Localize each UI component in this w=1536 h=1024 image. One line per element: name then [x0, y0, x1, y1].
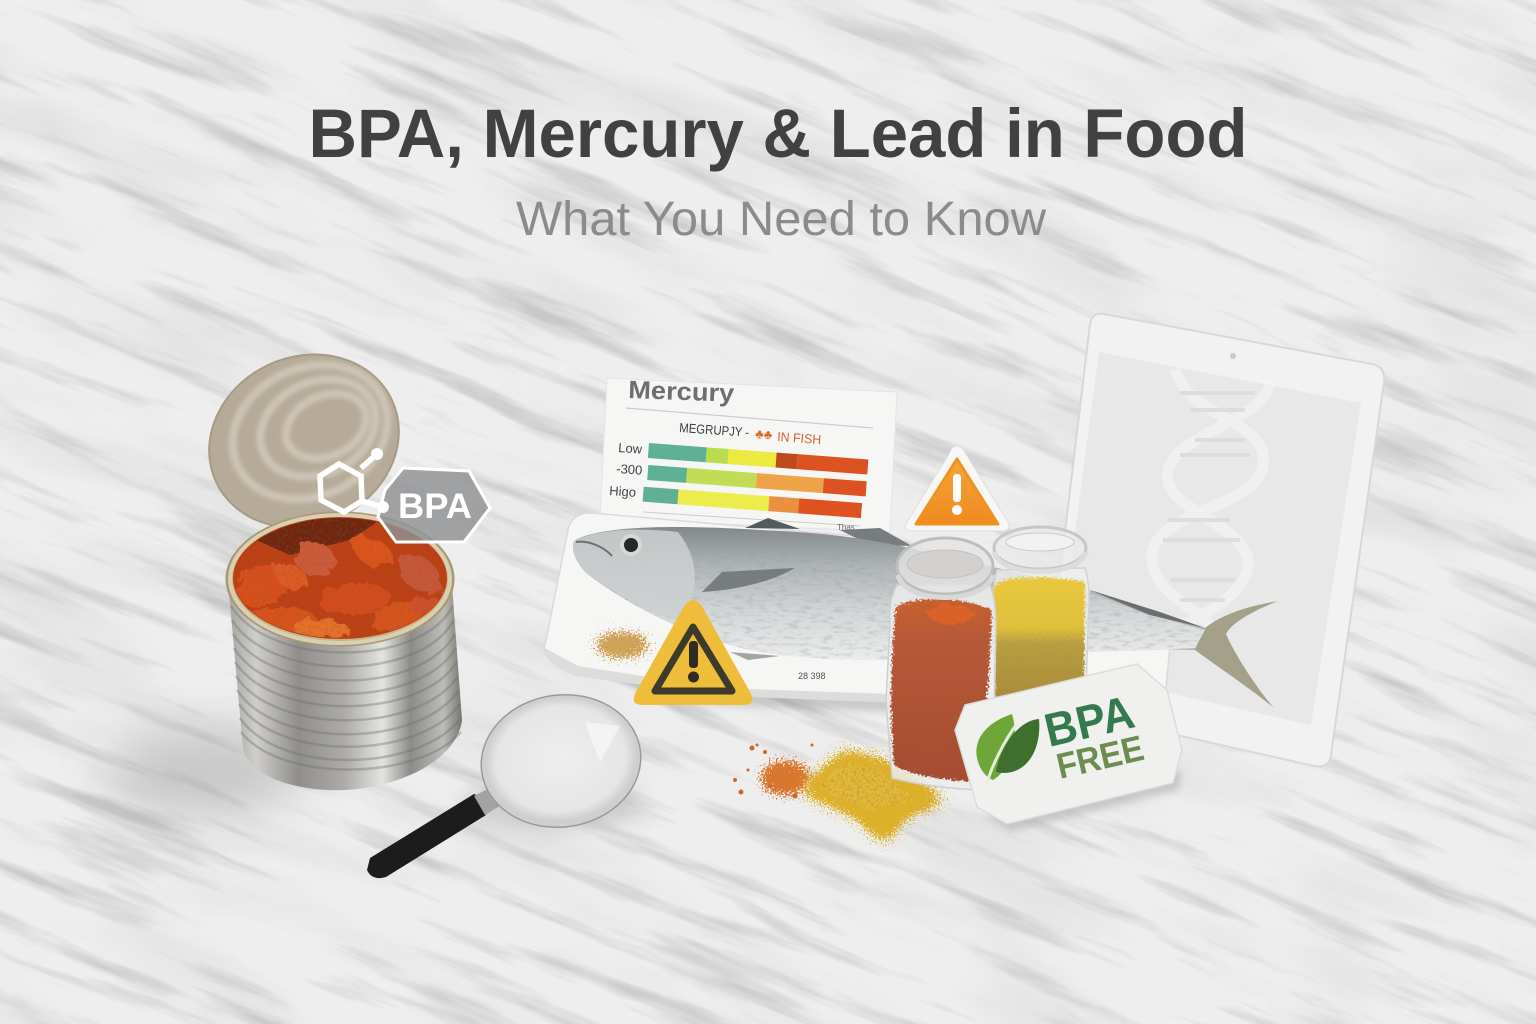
mercury chart card: IN FISH	[777, 429, 822, 447]
tomato pieces	[233, 516, 447, 639]
chart heading: Mercury	[628, 376, 735, 408]
icon: molecule	[320, 448, 388, 512]
red spice jar	[886, 538, 996, 790]
bar chart	[643, 443, 868, 518]
mercury chart card	[600, 376, 897, 532]
title: BPA, Mercury & Lead in Food	[308, 95, 1248, 172]
fish plate	[544, 513, 1170, 702]
BPA free tag	[955, 664, 1182, 824]
badge text: BPA	[398, 487, 472, 526]
shadow under tag	[985, 770, 1182, 832]
can lid	[181, 324, 427, 558]
spice jars	[886, 527, 1089, 790]
row labels: Higo	[609, 483, 637, 500]
row labels: -300	[616, 461, 643, 478]
chart subheading: MEGRUPJY -	[679, 420, 750, 440]
open can of tomatoes	[208, 354, 462, 790]
tag text: BPA: BPA	[1039, 685, 1139, 757]
small card note: Thas	[837, 523, 855, 532]
icon: orange warning triangle	[905, 446, 1009, 531]
can body	[228, 582, 462, 790]
BPA molecule badge	[320, 448, 490, 542]
subtitle: What You Need to Know	[516, 193, 1046, 246]
icon: leaf	[976, 714, 1039, 783]
icon: yellow warning triangle	[634, 600, 752, 705]
row labels	[609, 440, 643, 500]
icon: DNA helix	[1152, 370, 1270, 650]
row labels: Low	[618, 440, 643, 457]
plate label: 28 398	[798, 671, 826, 681]
fish	[573, 518, 1278, 708]
mercury chart card: ♣♣	[755, 426, 773, 442]
tablet with DNA	[1046, 314, 1384, 767]
shadow under can	[105, 728, 305, 812]
tag text: FREE: FREE	[1053, 727, 1148, 787]
yellow spice jar	[994, 527, 1089, 700]
shadow under plate	[550, 660, 1160, 712]
shadow under magnifier	[460, 779, 640, 831]
spice speckle on plate	[594, 633, 650, 657]
magnifying glass	[367, 685, 649, 878]
spice pile	[733, 744, 945, 842]
